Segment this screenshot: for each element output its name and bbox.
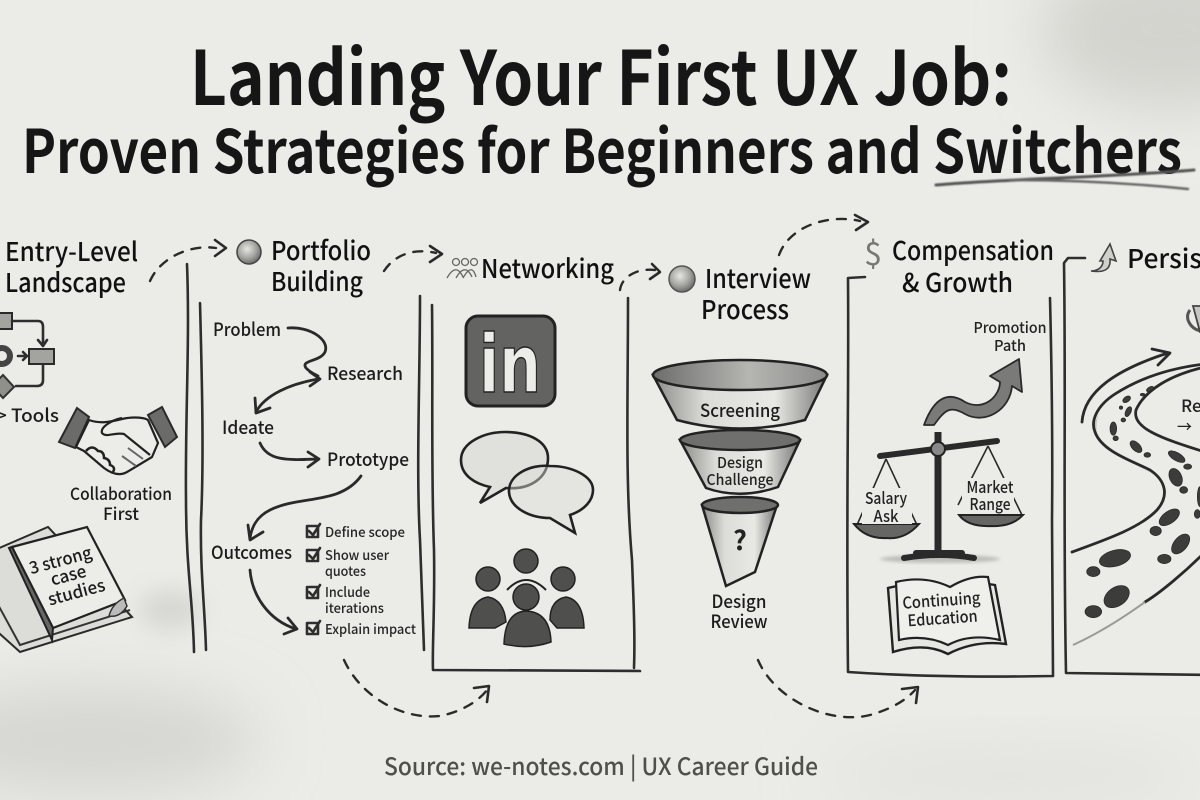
funnel: Screening	[653, 360, 827, 428]
winding road	[1072, 364, 1200, 645]
label: arrow: →	[1177, 416, 1192, 437]
arrow: Portfolio to Networking (bottom)	[344, 660, 489, 716]
arrow: Networking to Interview	[620, 264, 660, 290]
label: Design Review: Review	[710, 608, 768, 634]
icon: sphere	[669, 266, 695, 292]
checklist: Define scope	[325, 521, 405, 541]
heading: Compensation	[892, 231, 1054, 268]
panel border	[847, 277, 1053, 677]
funnel: Design Challenge	[680, 430, 800, 494]
panel: Persistence	[1064, 239, 1200, 675]
label: Collaboration First: First	[103, 500, 139, 525]
funnel: Design Review stage: ?	[733, 519, 747, 558]
icon: people outline	[447, 258, 478, 278]
icon: open book: Continuing	[901, 584, 981, 614]
step labels: Ideate	[222, 414, 274, 440]
label: Promotion Path: Path	[994, 335, 1026, 356]
icon: case study stack	[0, 527, 132, 652]
panel: Portfolio Building	[200, 231, 424, 650]
step labels: Prototype	[327, 446, 409, 472]
panel left border	[200, 303, 206, 650]
title: Landing Your First UX Job:	[190, 18, 1012, 127]
heading: Entry-Level	[5, 232, 138, 269]
icon: speech bubbles	[461, 432, 593, 533]
icon: open book	[888, 577, 1006, 654]
icon: handshake	[59, 407, 177, 474]
checklist: Explain impact	[325, 618, 417, 638]
case study text: 3 strong	[26, 538, 94, 579]
heading: Building	[271, 262, 363, 299]
case study text: case	[47, 557, 89, 591]
funnel: Screening: Screening	[700, 397, 781, 423]
icon: sphere	[237, 240, 261, 264]
icon: process flow diagram	[0, 313, 54, 398]
label: Salary Ask: Ask	[874, 503, 899, 527]
panel: Networking	[432, 249, 640, 671]
icon: LinkedIn: in	[479, 318, 541, 411]
panel border	[432, 305, 640, 671]
funnel: Design Challenge: Challenge	[706, 469, 774, 490]
icon: balance scale	[854, 432, 1023, 563]
label: Salary Ask: Salary	[865, 485, 907, 509]
step labels: Research	[327, 360, 403, 386]
heading: Networking	[481, 249, 614, 286]
checklist	[307, 521, 417, 638]
heading: & Growth	[902, 263, 1013, 300]
label: Market Range: Market	[966, 474, 1014, 498]
funnel: Design Review stage	[702, 497, 778, 586]
case study text: studies	[45, 571, 108, 610]
label: Collaboration First: Collaboration	[70, 480, 172, 505]
arrow: upward path	[1082, 349, 1170, 422]
step labels: Outcomes	[211, 539, 292, 565]
heading: Landscape	[5, 263, 126, 300]
checklist: quotes	[325, 560, 366, 580]
panel: Compensation and Growth	[847, 229, 1054, 677]
source line: Source: we-notes.com | UX Career Guide	[384, 747, 818, 782]
icon: group of people	[469, 549, 584, 647]
panel right border	[418, 296, 424, 650]
checklist: Show user	[325, 544, 389, 564]
arrow: Interview to Compensation (top)	[779, 215, 868, 255]
arrow: Entry-Level to Portfolio	[150, 240, 226, 281]
icon: open book: Education	[907, 603, 978, 631]
label: Promotion Path: Promotion	[974, 317, 1046, 338]
panel: Entry-Level Landscape	[0, 232, 194, 652]
panel: Interview Process	[653, 259, 827, 634]
icon: up arrow	[1091, 244, 1116, 272]
panel border	[1064, 258, 1200, 675]
label: Design Review: Design	[712, 588, 766, 614]
step labels	[211, 316, 409, 565]
case study text	[26, 538, 108, 610]
footprints	[1085, 385, 1200, 618]
checklist: iterations	[325, 597, 384, 617]
title underline	[936, 170, 1194, 189]
icon: trophy	[1188, 306, 1200, 332]
heading: Process	[701, 290, 789, 327]
arrow: Portfolio to Networking (top)	[384, 246, 442, 271]
heading: Portfolio	[271, 231, 371, 268]
heading: Interview	[705, 259, 811, 296]
step labels: Problem	[213, 316, 281, 342]
arrow: Interview to Compensation (bottom)	[758, 660, 918, 717]
funnel: Design Challenge: Design	[717, 452, 763, 473]
flow arrows	[248, 328, 361, 634]
arrow: promotion growth	[924, 359, 1022, 425]
title	[22, 18, 1182, 191]
label: Market Range: Range	[970, 491, 1010, 515]
checklist: Include	[325, 581, 370, 601]
icon: dollar sign: $	[864, 229, 882, 275]
panel divider	[186, 264, 194, 652]
